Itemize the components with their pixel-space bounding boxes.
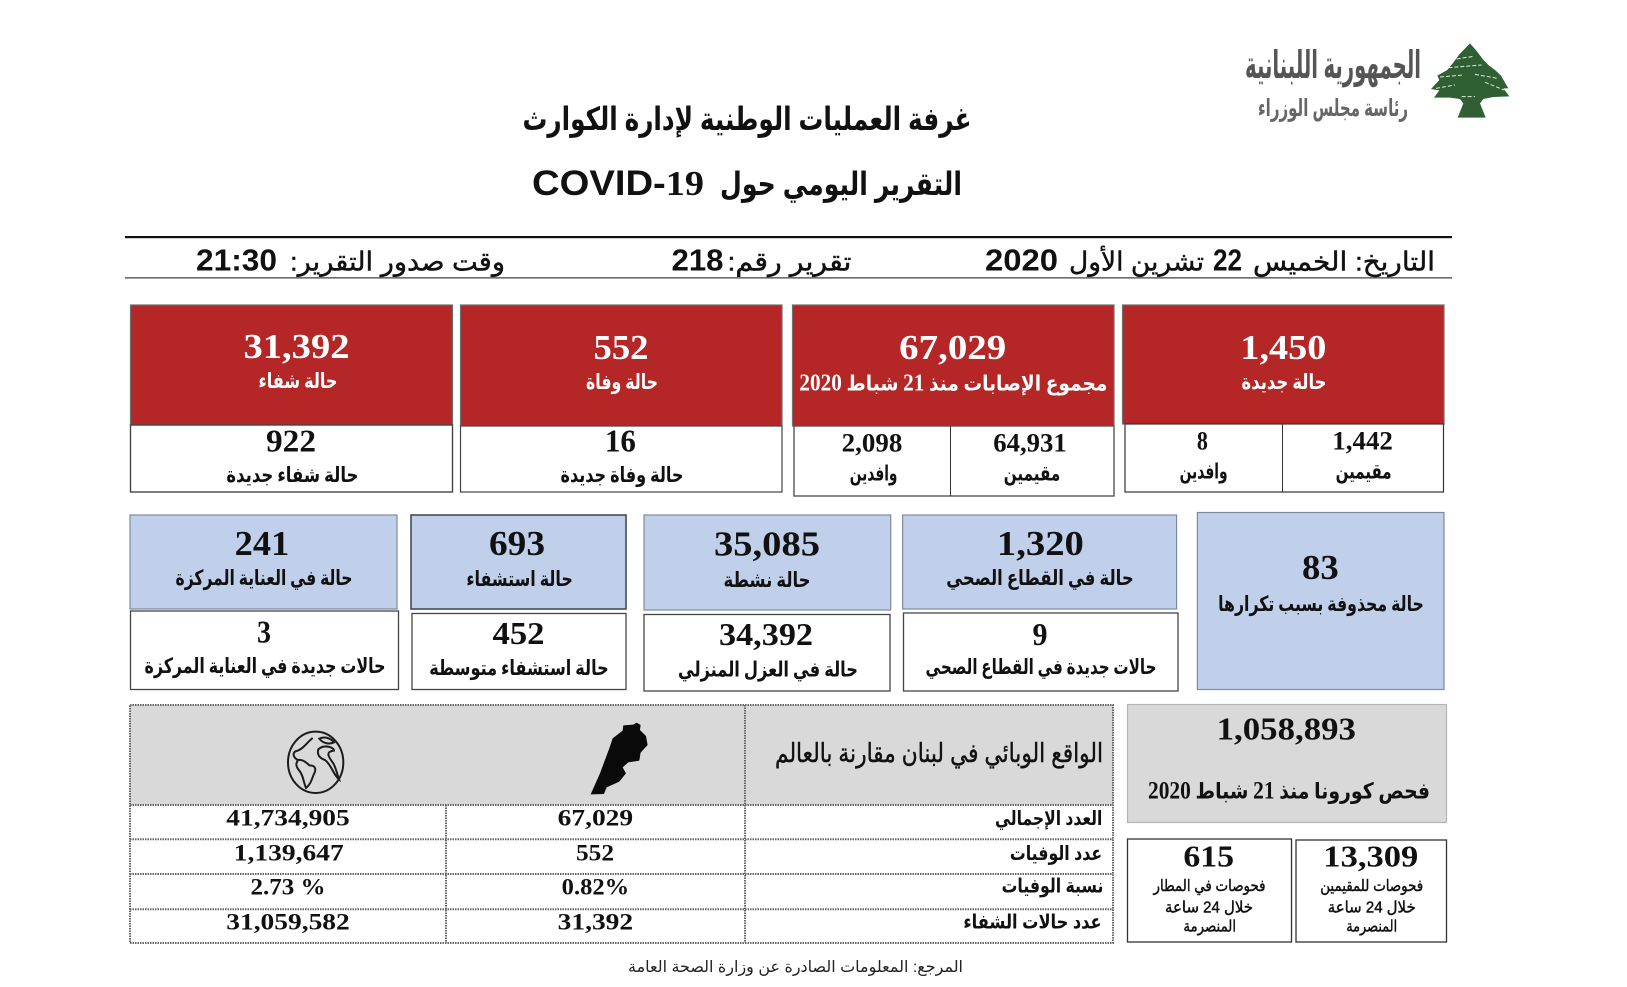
panel: total cases: مقيمين [1004, 462, 1060, 486]
report date: 2020 [985, 243, 1058, 278]
panel: total PCR tests: فحص كورونا منذ 21 شباط 2020 [1148, 777, 1430, 804]
panel: total cases [792, 305, 1114, 496]
panel: active cases [644, 515, 891, 691]
active cases: 35,085 [714, 525, 820, 564]
panel: new cases: حالة جديدة [1242, 370, 1326, 394]
panel: deaths: حالة وفاة [586, 370, 658, 394]
home isolation: 34,392 [719, 616, 813, 652]
logo line: Lebanese Republic: الجمهورية اللبنانية [1245, 45, 1421, 87]
panel: health sector: حالات جديدة في القطاع الصحي [926, 655, 1156, 679]
report number: 218 [672, 243, 724, 278]
new ICU cases: 3 [257, 614, 271, 650]
panel: total cases: مجموع الإصابات منذ 21 شباط 2020 [799, 371, 1107, 397]
panel: resident tests: 13,309 [1323, 838, 1418, 874]
panel: resident tests: فحوصات للمقيمين [1320, 878, 1423, 896]
row: total: 67,029 [558, 806, 633, 831]
total arrivals: 2,098 [842, 429, 902, 458]
icon: globe [288, 732, 343, 793]
row: recoveries [226, 909, 1102, 934]
logo line: council of ministers: رئاسة مجلس الوزراء [1258, 95, 1408, 122]
new residents: 1,442 [1332, 426, 1393, 455]
icon: Lebanon map [591, 723, 648, 794]
panel: ICU: حالة في العناية المركزة [176, 566, 352, 590]
panel: removed duplicates: 83 [1302, 548, 1339, 587]
report time: وقت صدور التقرير: [290, 247, 505, 278]
panel: recoveries [130, 305, 452, 492]
row: deaths [234, 841, 1102, 866]
row: recoveries: 31,059,582 [226, 909, 350, 934]
comparison table: Lebanon vs world [130, 705, 1113, 943]
panel: hospitalised [411, 515, 626, 690]
row: recoveries: عدد حالات الشفاء [963, 911, 1102, 933]
new arrivals: 8 [1197, 426, 1208, 455]
panel: recoveries: حالة شفاء جديدة [226, 463, 358, 487]
title line 2 latin: COVID- 19 [532, 164, 704, 203]
panel: airport tests: فحوصات في المطار [1153, 878, 1266, 896]
panel: total cases: وافدين [850, 462, 897, 486]
row: death rate: 0.82% [562, 874, 629, 899]
panel: total PCR tests [1128, 704, 1446, 822]
total cases: 67,029 [899, 328, 1006, 367]
title line 1: غرفة العمليات الوطنية لإدارة الكوارث [522, 101, 972, 138]
health sector cases: 1,320 [997, 524, 1084, 563]
source note: المرجع: المعلومات الصادرة عن وزارة الصحة العامة [628, 959, 963, 977]
row: death rate: نسبة الوفيات [1002, 876, 1103, 898]
logo: Lebanese Republic presidency of the council of ministers [1245, 43, 1509, 122]
panel: health sector [903, 515, 1178, 691]
row: deaths: 1,139,647 [234, 841, 344, 866]
panel: resident tests [1296, 838, 1446, 942]
report date: تشرين الأول [1069, 245, 1204, 278]
panel: resident tests: خلال 24 ساعة [1328, 900, 1416, 917]
new recoveries: 922 [266, 423, 316, 459]
row: deaths: 552 [576, 841, 614, 866]
panel: health sector: حالة في القطاع الصحي [946, 566, 1134, 590]
panel: new cases [1122, 305, 1444, 492]
report time: 21:30 [196, 243, 277, 278]
panel: hospitalised: حالة استشفاء متوسطة [429, 656, 609, 680]
row: recoveries: 31,392 [558, 909, 633, 934]
title line 2 arabic: التقرير اليومي حول [720, 166, 962, 203]
panel: ICU [130, 515, 398, 690]
row: total [226, 806, 1102, 831]
ICU cases: 241 [235, 524, 289, 563]
panel: hospitalised: حالة استشفاء [466, 567, 573, 591]
panel: removed duplicates [1197, 512, 1444, 690]
row: death rate: 2.73 % [250, 874, 326, 899]
report number: تقرير رقم: [728, 247, 852, 278]
icon: cedar tree [1431, 43, 1509, 118]
panel: active cases: حالة في العزل المنزلي [678, 658, 858, 682]
new deaths: 16 [605, 423, 636, 459]
row: total: العدد الإجمالي [995, 808, 1102, 831]
panel: ICU: حالات جديدة في العناية المركزة [144, 654, 386, 678]
total deaths: 552 [594, 328, 648, 367]
moderate hospital cases: 452 [492, 615, 544, 651]
panel: new cases: وافدين [1180, 459, 1228, 483]
report info bar [125, 236, 1452, 278]
panel: airport tests: 615 [1183, 838, 1234, 874]
panel: deaths: حالة وفاة جديدة [560, 463, 684, 487]
report date: 22 [1213, 243, 1242, 278]
row: deaths: عدد الوفيات [1010, 843, 1102, 865]
panel: airport tests: المنصرمة [1183, 919, 1236, 937]
panel: airport tests: خلال 24 ساعة [1165, 900, 1253, 917]
panel: resident tests: المنصرمة [1346, 919, 1397, 937]
report date: التاريخ: الخميس [1253, 247, 1435, 278]
panel: airport tests [1128, 838, 1292, 942]
panel: new cases: مقيمين [1336, 459, 1392, 483]
new cases: 1,450 [1240, 328, 1326, 367]
hospital cases: 693 [489, 524, 545, 563]
report time [196, 243, 505, 278]
table heading: الواقع الوبائي في لبنان مقارنة بالعالم [775, 738, 1103, 769]
panel: removed duplicates: حالة محذوفة بسبب تكرارها [1218, 592, 1424, 616]
total recoveries: 31,392 [244, 327, 350, 366]
panel: recoveries: حالة شفاء [258, 369, 338, 393]
title [522, 101, 972, 203]
total residents: 64,931 [993, 429, 1067, 458]
new health sector cases: 9 [1032, 616, 1048, 652]
panel: active cases: حالة نشطة [724, 568, 810, 592]
panel: total PCR tests: 1,058,893 [1217, 710, 1356, 746]
report date [985, 243, 1435, 278]
report number [672, 243, 852, 278]
panel: deaths [460, 305, 782, 492]
row: death rate [250, 874, 1103, 899]
row: total: 41,734,905 [226, 806, 350, 831]
